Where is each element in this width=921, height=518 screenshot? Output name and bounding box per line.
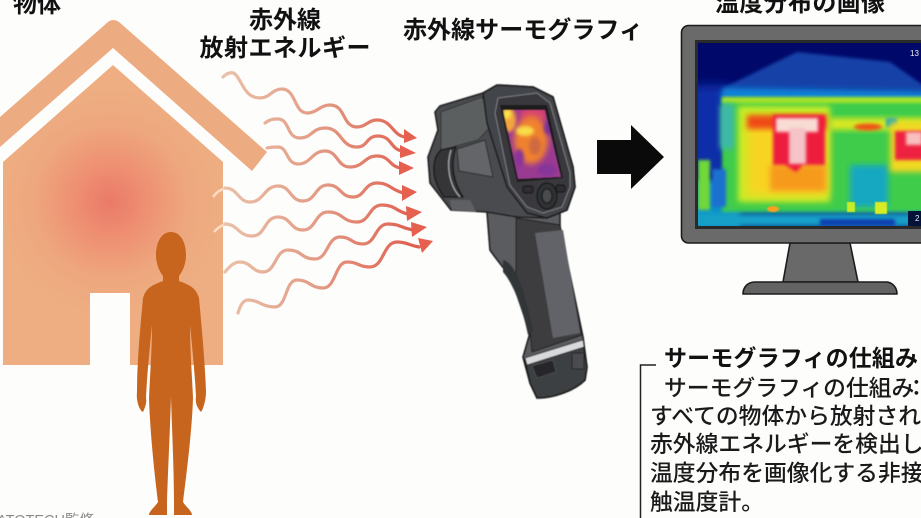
bottom ledge <box>450 200 476 212</box>
explanation text: 触温度計。 <box>650 489 764 515</box>
camera buttons <box>523 183 565 209</box>
camera thermal screen <box>502 107 561 179</box>
camera body rear <box>428 85 575 218</box>
rear top panel <box>441 97 495 150</box>
arrow: camera to monitor <box>597 125 664 189</box>
label: infrared thermography: 赤外線サーモグラフィ <box>403 16 643 44</box>
explanation text: すべての物体から放射され <box>650 403 921 429</box>
box bracket <box>640 365 656 518</box>
rear lens housing <box>434 147 463 197</box>
label: infrared radiation energy <box>200 7 370 62</box>
thermal image of a house: 2 <box>915 214 920 223</box>
house body with heat glow <box>3 65 223 365</box>
explanation box <box>640 345 921 518</box>
side panel <box>457 140 493 177</box>
thermal fence <box>698 160 710 210</box>
monitor base <box>743 282 897 294</box>
temperature readouts <box>908 211 921 226</box>
explanation text: サーモグラフィの仕組み <box>664 375 914 401</box>
infrared waves with arrowheads <box>213 73 433 313</box>
thermal image of a house: 13 <box>910 49 919 58</box>
battery base <box>525 342 587 398</box>
explanation text <box>650 375 921 515</box>
monitor stand <box>783 243 858 282</box>
camera front bezel <box>483 85 575 218</box>
grip side shadow <box>503 260 533 335</box>
label: infrared radiation energy: 赤外線 <box>249 7 321 34</box>
monitor frame <box>682 26 921 243</box>
thermal camera illustration <box>428 85 587 398</box>
bezel inner rim <box>495 93 570 213</box>
thermal windows <box>773 115 825 172</box>
monitor <box>682 26 921 294</box>
grip dark inlay <box>516 218 582 352</box>
grip light panel <box>535 230 580 338</box>
explanation heading: サーモグラフィの仕組み <box>664 345 918 371</box>
house roof <box>0 20 267 171</box>
thermal image of a house <box>690 43 921 230</box>
explanation text: 温度分布を画像化する非接 <box>650 460 921 486</box>
thermal wall <box>722 99 921 213</box>
label: infrared radiation energy: 放射エネルギー <box>200 35 370 62</box>
camera grip <box>487 212 587 398</box>
thermal roof <box>723 50 921 95</box>
house illustration <box>0 20 267 365</box>
explanation text: 赤外線エネルギーを検出し <box>650 431 921 457</box>
thermal ground <box>695 213 921 227</box>
screen frame <box>500 105 563 182</box>
person silhouette <box>137 232 206 515</box>
